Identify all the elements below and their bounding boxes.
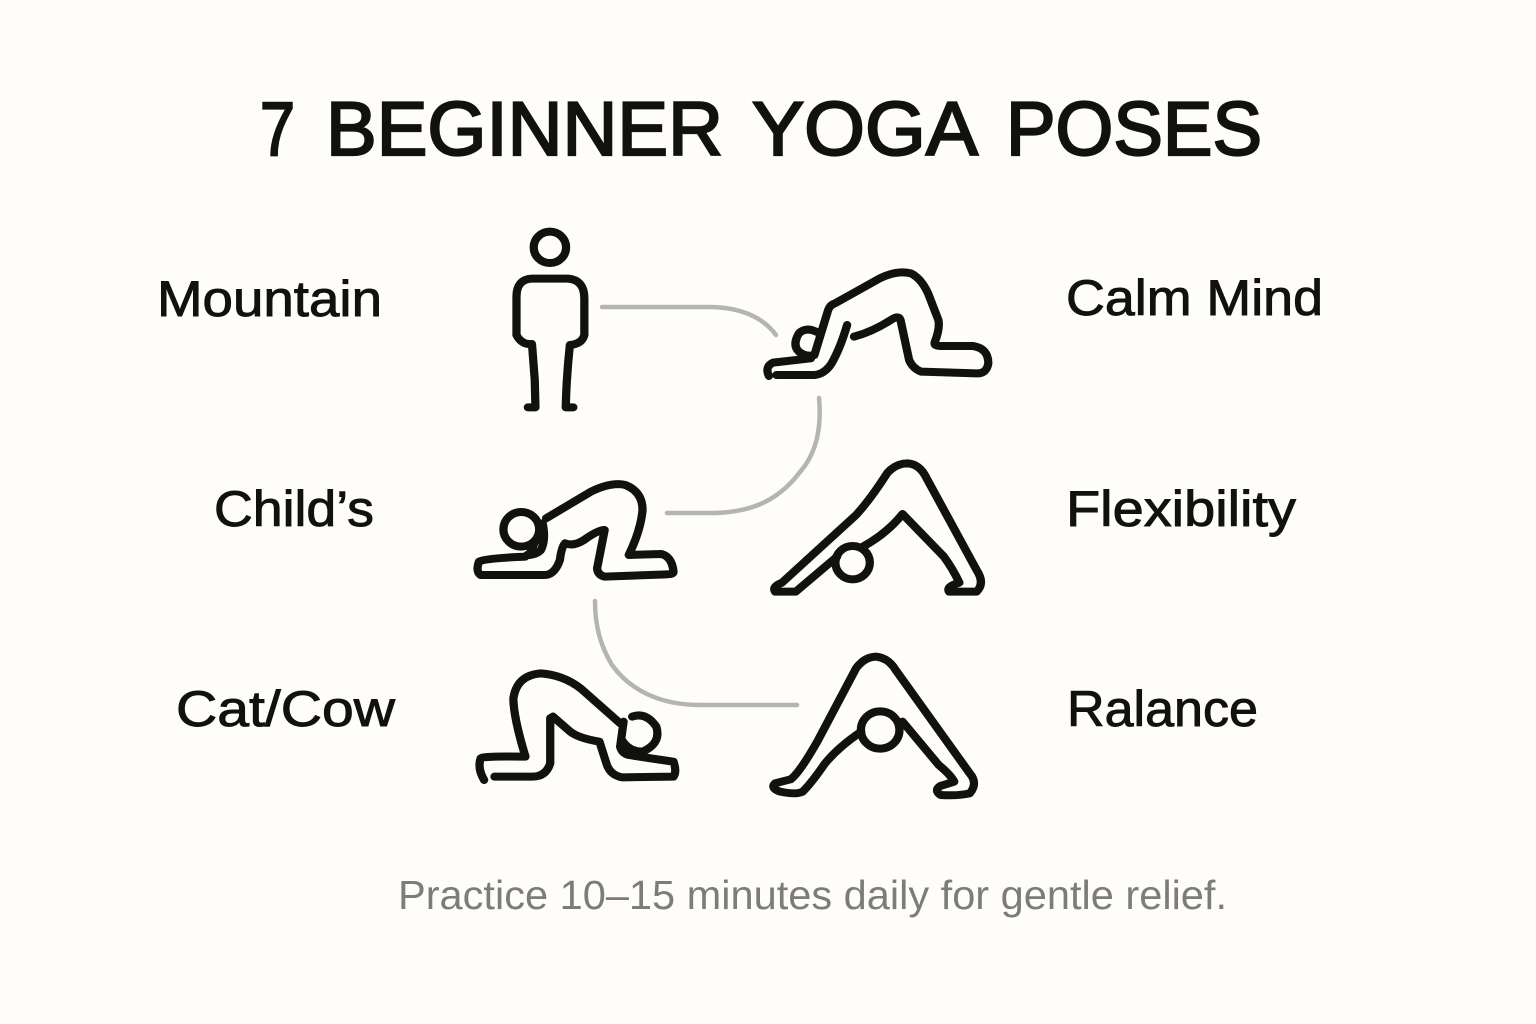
icon: mountain pose [516,232,584,407]
title: BEGINNER [326,87,723,172]
label: Cat/Cow: Cat/Cow [176,681,396,737]
title: 7 [260,87,295,172]
label: Child's: Child’s [214,481,374,537]
connector: Child's to Balance [595,601,797,705]
icon: balance pose [773,657,974,795]
title: YOGA [752,87,978,172]
label: Ralance: Ralance [1067,681,1258,737]
title: POSES [1006,87,1262,172]
footer note: Practice 10–15 minutes daily for gentle relief. [398,872,1227,918]
connector: Mountain to Calm Mind [602,307,776,335]
icon: calm mind pose [767,272,988,376]
label: Flexibility: Flexibility [1066,481,1296,537]
label: Calm Mind: Calm Mind [1066,270,1323,326]
icon: child's pose [478,484,674,577]
icon: flexibility pose [774,463,981,592]
icon: cat/cow pose [480,673,675,780]
connector: Calm Mind to Child's [667,398,820,513]
label: Mountain: Mountain [157,271,382,327]
